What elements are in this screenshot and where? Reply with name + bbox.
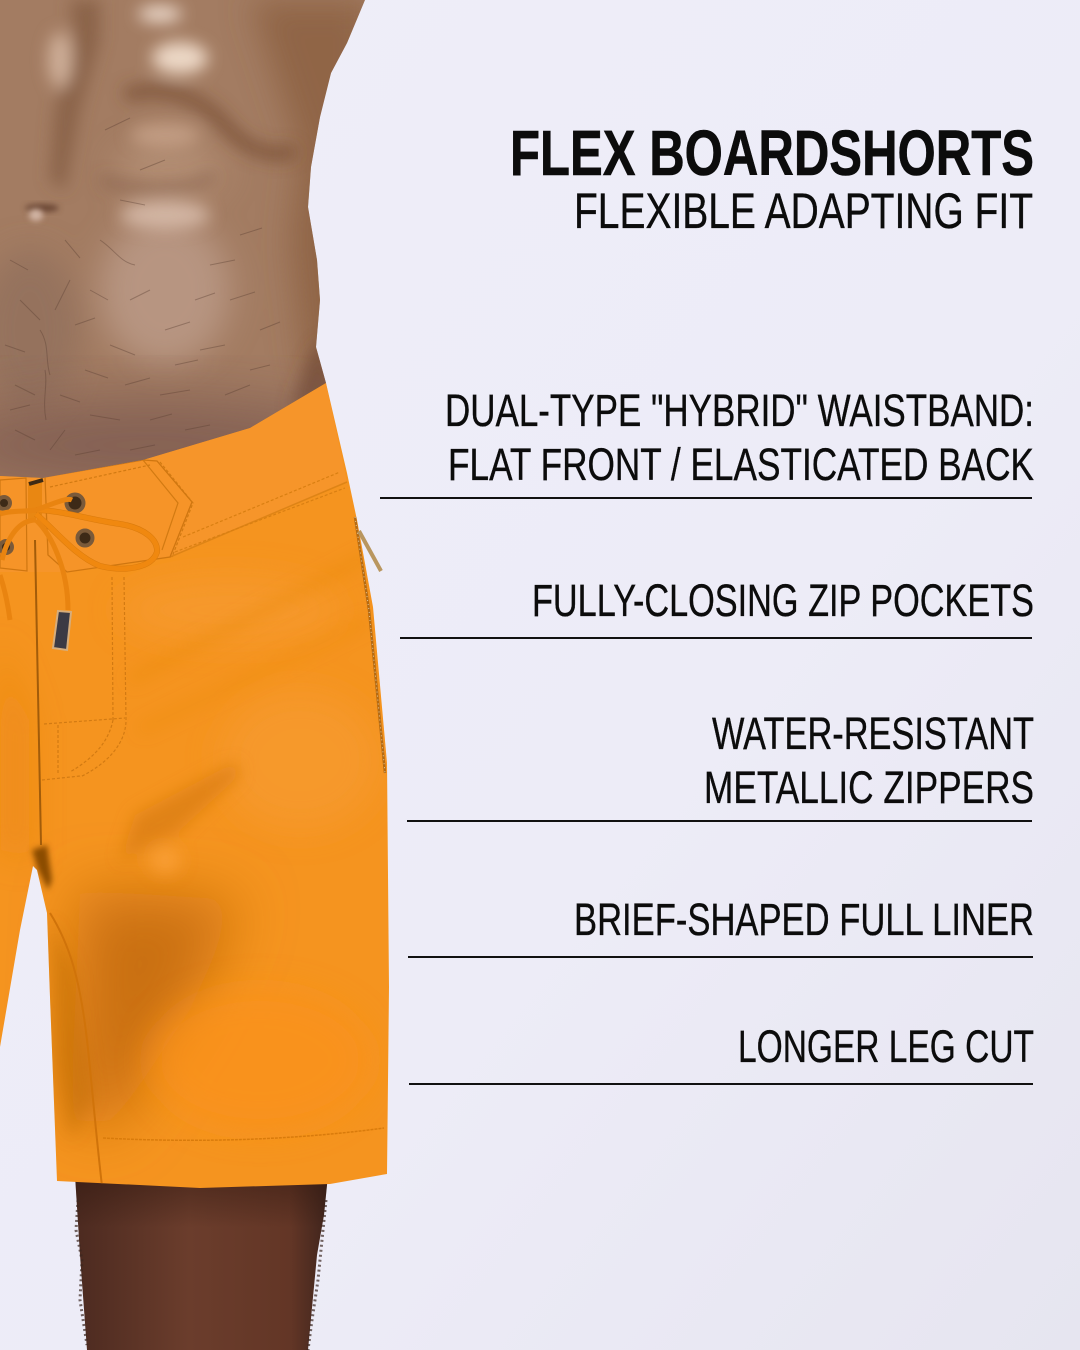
waistband front tab	[45, 460, 192, 572]
zip pull	[359, 531, 381, 571]
feature: waistband	[380, 385, 1034, 499]
crotch shadow	[32, 845, 52, 890]
torso	[0, 0, 370, 500]
eyelets	[0, 494, 92, 553]
orange boardshorts	[0, 370, 400, 1200]
fly stitching	[35, 540, 126, 845]
navel	[25, 204, 59, 221]
feature: zippers	[407, 708, 1034, 822]
body hair	[5, 118, 280, 455]
side zip pocket	[355, 517, 385, 773]
drawcord	[0, 499, 157, 620]
hem	[103, 1128, 384, 1140]
cord tip	[53, 611, 71, 650]
title	[510, 117, 1034, 239]
photo: model wearing orange boardshorts	[0, 0, 400, 1350]
leg	[75, 1175, 328, 1350]
inseam	[50, 913, 102, 1186]
waistband	[0, 383, 347, 572]
